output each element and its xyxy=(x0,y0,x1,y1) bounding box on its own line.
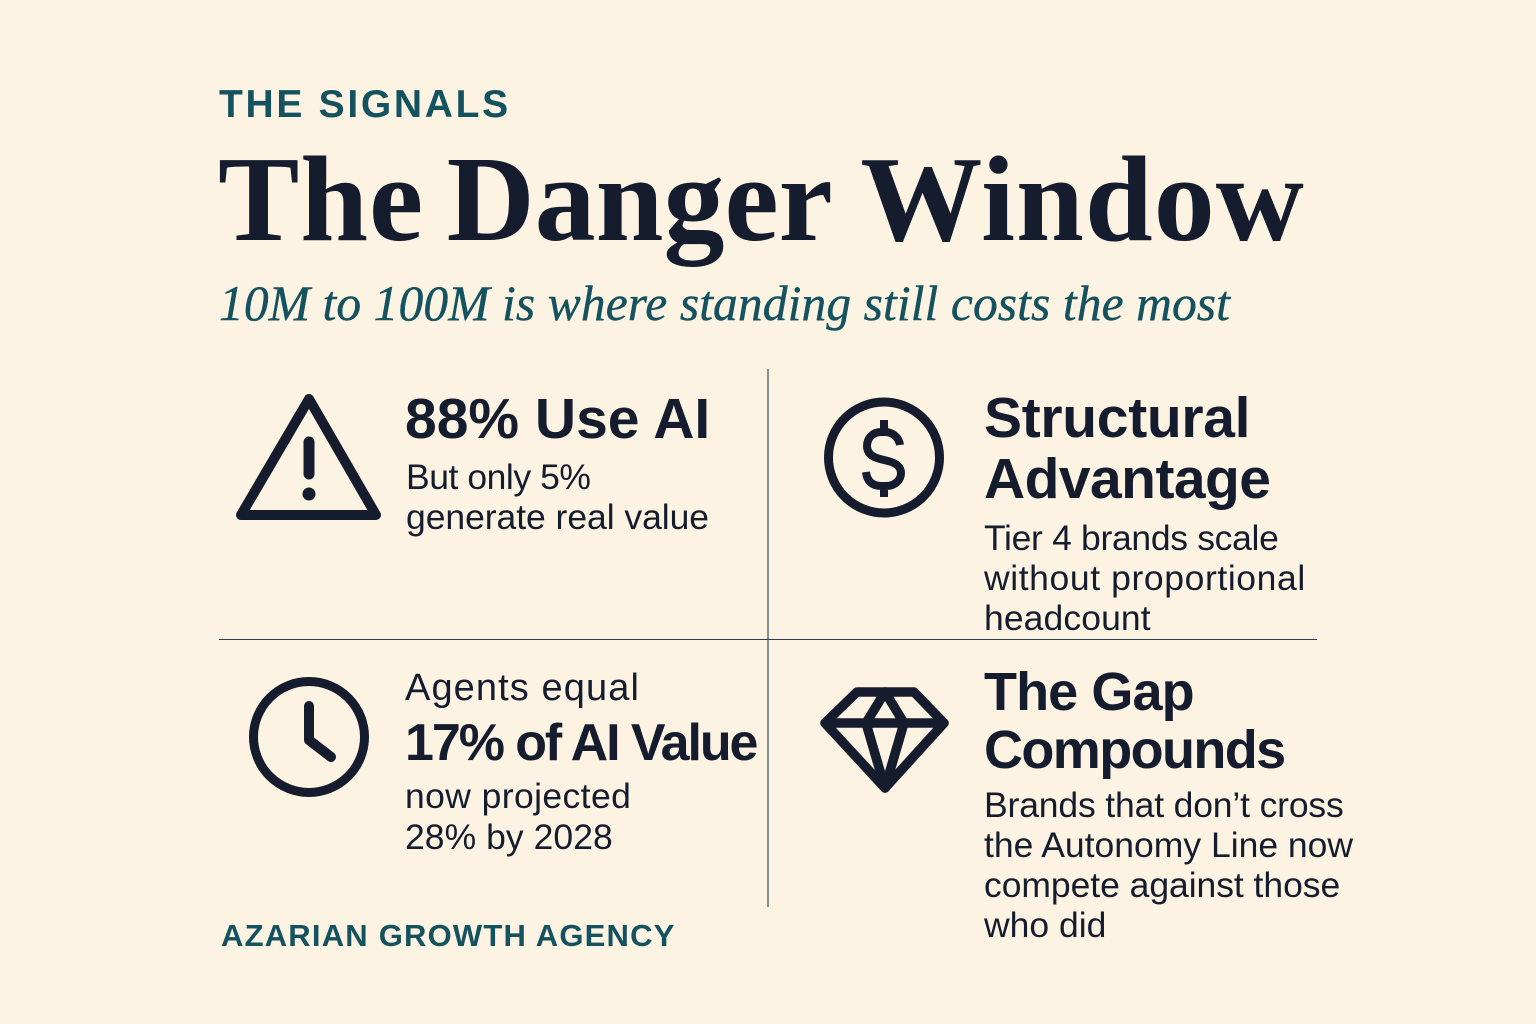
body text: Brands that don’t cross xyxy=(984,785,1344,825)
icon: warning triangle xyxy=(236,394,381,520)
icon: dollar coin xyxy=(824,398,944,518)
footer: agency name: AZARIAN GROWTH AGENCY xyxy=(221,918,676,953)
icon: diamond xyxy=(820,687,949,793)
heading: Advantage xyxy=(984,447,1270,511)
heading xyxy=(984,386,1270,511)
body text: generate real value xyxy=(406,497,709,537)
heading xyxy=(984,662,1285,780)
body text xyxy=(984,518,1306,638)
body text: compete against those xyxy=(984,865,1340,905)
heading: The Gap xyxy=(984,662,1194,722)
body text: who did xyxy=(984,905,1106,945)
heading: Structural xyxy=(984,386,1250,450)
panel: 88% use AI xyxy=(236,386,710,537)
body text: 28% by 2028 xyxy=(405,816,613,856)
body text: now projected xyxy=(405,776,631,816)
body text xyxy=(984,785,1354,945)
subtitle: 10M to 100M is where standing still costs the most xyxy=(219,276,1230,331)
panel: structural advantage xyxy=(824,386,1306,638)
body text: without proportional xyxy=(984,558,1306,598)
lead-in text: Agents equal xyxy=(405,667,640,709)
body text: the Autonomy Line now xyxy=(984,825,1353,865)
body text xyxy=(406,457,709,537)
body text: Tier 4 brands scale xyxy=(984,518,1278,558)
vertical divider xyxy=(767,369,769,907)
title: The Danger Window xyxy=(218,132,1305,267)
panel: agents equal xyxy=(249,667,757,856)
body text: headcount xyxy=(984,598,1151,638)
panel: the gap compounds xyxy=(820,662,1354,945)
horizontal divider xyxy=(219,639,1317,640)
body text: But only 5% xyxy=(406,457,590,497)
heading: 17% of AI Value xyxy=(405,714,756,772)
eyebrow: the signals: THE SIGNALS xyxy=(219,82,511,126)
icon: clock xyxy=(249,677,369,797)
body text xyxy=(405,776,631,856)
heading: Compounds xyxy=(984,720,1285,780)
heading: 88% Use AI xyxy=(405,386,710,450)
